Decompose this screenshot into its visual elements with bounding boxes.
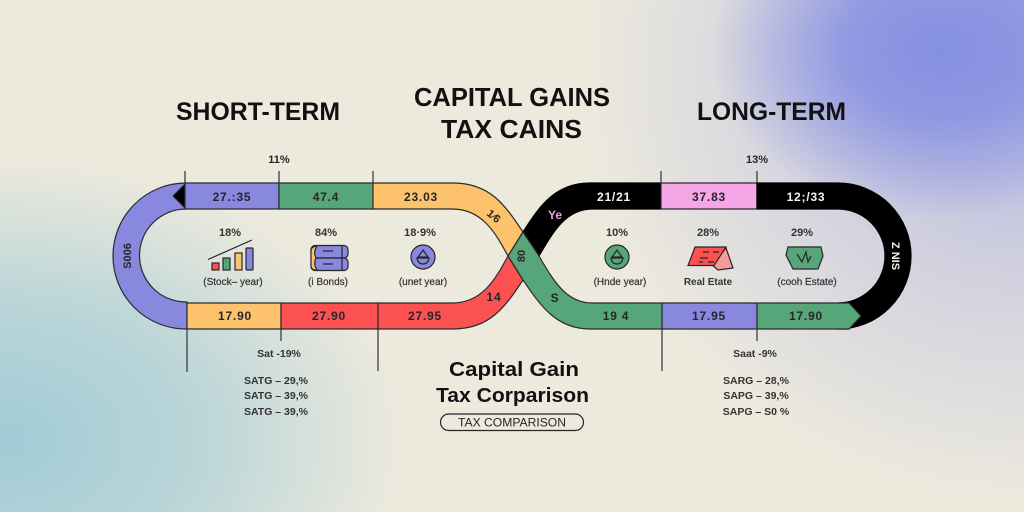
left notes: SATG – 39,% [244, 390, 309, 402]
percent labels row: 29% [791, 227, 813, 239]
segment: bottom orange [187, 303, 281, 329]
left notes: SATG – 39,% [244, 406, 309, 418]
segment: top violet [185, 183, 279, 209]
pill: tax comparison: TAX COMPARISON [458, 418, 566, 430]
icon: bonds [311, 246, 348, 270]
segment: top pink [661, 183, 757, 209]
left notes: SATG – 29,% [244, 375, 309, 387]
segment: green curve [508, 232, 662, 329]
title: capital gains tax cains [414, 82, 610, 144]
icon: cash [786, 247, 823, 269]
right notes: Saat -9% [733, 348, 778, 360]
curve labels: Ye [548, 208, 562, 222]
track values: 37.83 [692, 190, 726, 204]
percent labels row [219, 227, 813, 239]
percent labels row: 18% [219, 227, 241, 239]
curve labels: S006 [122, 243, 134, 269]
track values: 17.90 [218, 309, 252, 323]
pill: tax comparison [440, 414, 584, 430]
icon captions [203, 277, 837, 288]
segment: bottom green arrow [757, 303, 861, 329]
icon captions: (i Bonds) [308, 277, 348, 288]
track values: 27.:35 [213, 190, 251, 204]
track values: 17.95 [692, 309, 726, 323]
icon: violet coin [411, 245, 435, 269]
bottom title [436, 359, 589, 407]
track values: 19 4 [603, 309, 629, 323]
segment: black curve [523, 183, 661, 256]
icon captions: Real Etate [684, 277, 733, 288]
track values: 23.03 [404, 190, 438, 204]
icon: green coin [605, 245, 629, 269]
icon captions: (Hnde year) [594, 277, 646, 288]
right notes: SARG – 28,% [723, 375, 790, 387]
track values: 27.90 [312, 309, 346, 323]
left notes [244, 348, 309, 418]
bottom title: Capital Gain [449, 359, 579, 381]
icon captions: (Stock– year) [203, 277, 263, 288]
title: short-term: SHORT-TERM [176, 98, 340, 126]
curve labels: 80 [516, 250, 528, 262]
track values: 14 [487, 290, 501, 304]
percent labels row: 84% [315, 227, 337, 239]
track values: 21/21 [597, 190, 631, 204]
segment: red curve [378, 256, 523, 329]
left notes: Sat -19% [257, 348, 302, 360]
top percent labels: 11% [268, 154, 290, 166]
right notes: SAPG – 39,% [723, 390, 789, 402]
track values: 27.95 [408, 309, 442, 323]
curve labels: 1⁄6 [484, 208, 503, 226]
track values: 12;/33 [787, 190, 825, 204]
percent labels row: 28% [697, 227, 719, 239]
icon captions: (cooh Estate) [777, 277, 837, 288]
segment: bottom red [281, 303, 378, 329]
title: long-term: LONG-TERM [697, 98, 846, 126]
title: capital gains tax cains: TAX CAINS [441, 114, 582, 144]
top percent labels [268, 154, 768, 166]
track values: 47.4 [313, 190, 339, 204]
right notes [723, 348, 790, 418]
icon captions: (unet year) [399, 277, 447, 288]
track values [213, 190, 825, 323]
bottom title: Tax Corparison [436, 385, 589, 407]
tick lines [185, 171, 757, 372]
percent labels row: 18·9% [404, 227, 436, 239]
track values: S [551, 291, 559, 305]
infinity track [113, 183, 911, 329]
icon: real estate [688, 247, 733, 270]
right notes: SAPG – S0 % [723, 406, 790, 418]
track values: 17.90 [789, 309, 823, 323]
segment: right black arc [757, 183, 911, 329]
segment: bottom violet [662, 303, 757, 329]
icon: bar chart [208, 240, 253, 270]
arrow notch [173, 184, 185, 208]
percent labels row: 10% [606, 227, 628, 239]
curve labels [122, 208, 901, 270]
top percent labels: 13% [746, 154, 768, 166]
segment: orange curve [373, 183, 523, 256]
curve labels: Z NIS [889, 242, 901, 270]
title: capital gains tax cains: CAPITAL GAINS [414, 82, 610, 112]
segment: top green [279, 183, 373, 209]
segment: left arc violet [113, 183, 187, 329]
